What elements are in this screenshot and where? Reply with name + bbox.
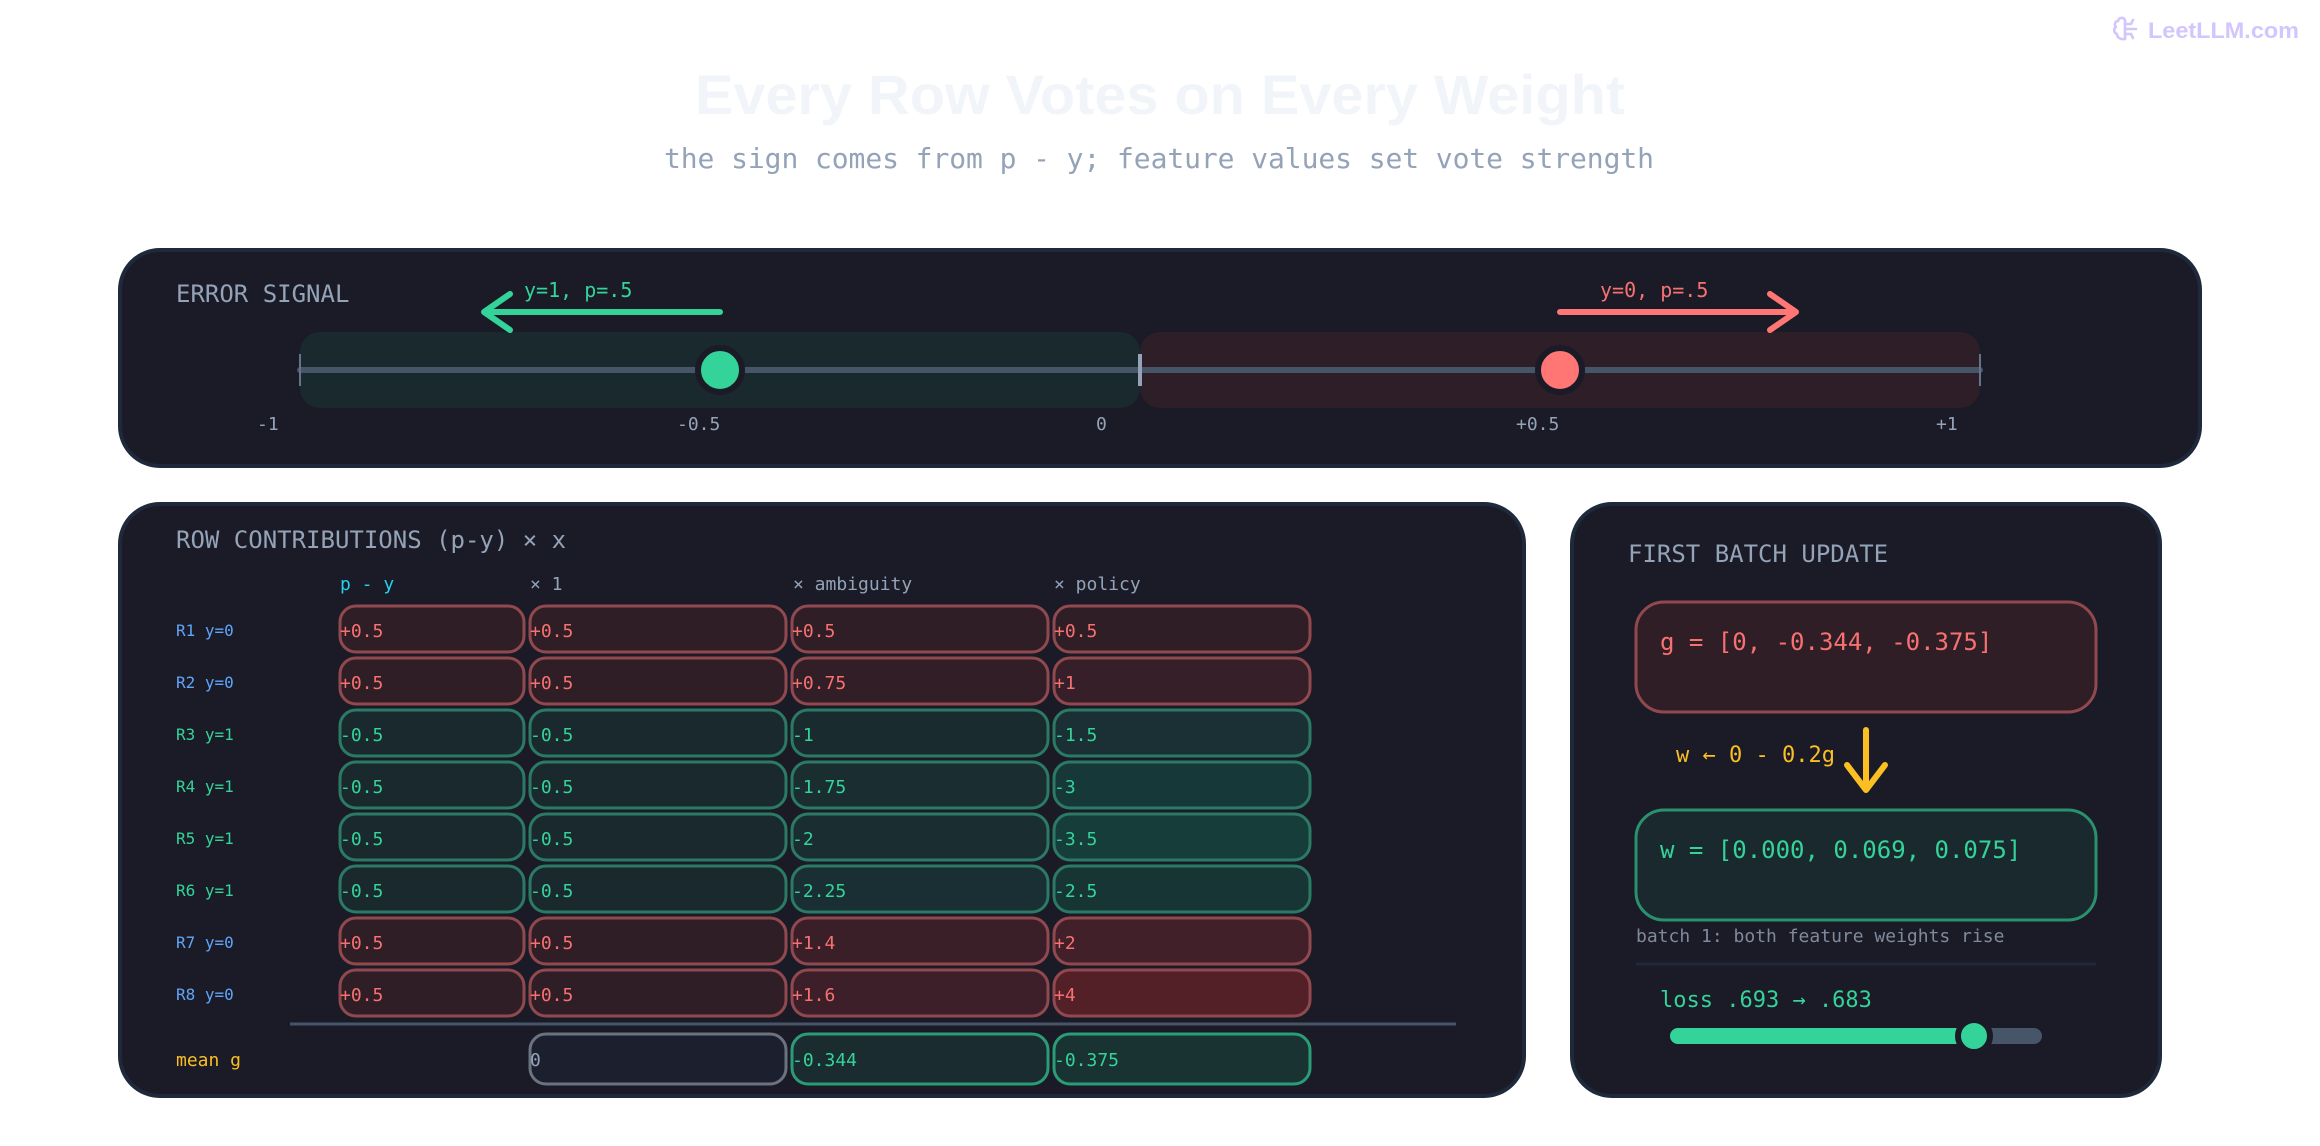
gradient box: g = [0, -0.344, -0.375] bbox=[1660, 628, 1992, 656]
icon: brain bbox=[2114, 18, 2136, 39]
row R3: -1.5 bbox=[1054, 725, 1097, 746]
row R1: +0.5 bbox=[530, 621, 573, 642]
column headers: × policy bbox=[1054, 574, 1141, 595]
axis labels: +1 bbox=[1936, 414, 1958, 435]
row: mean g: mean g bbox=[176, 1050, 241, 1071]
row R1 bbox=[176, 606, 1310, 652]
row R5: -0.5 bbox=[340, 829, 383, 850]
arrow: left, green bbox=[484, 294, 720, 330]
arrow: down bbox=[1847, 730, 1885, 790]
update rule: w ← 0 - 0.2g bbox=[1676, 743, 1835, 768]
row R3 bbox=[176, 710, 1310, 756]
row R1: R1 y=0 bbox=[176, 621, 234, 640]
number line bands bbox=[300, 332, 1980, 408]
row R8: R8 y=0 bbox=[176, 985, 234, 1004]
number line track and ticks bbox=[300, 354, 1980, 386]
loss label: loss .693 → .683 bbox=[1660, 988, 1872, 1013]
row R3: -0.5 bbox=[530, 725, 573, 746]
axis labels bbox=[257, 414, 1958, 435]
arrow: right, red bbox=[1560, 294, 1796, 330]
row R1: +0.5 bbox=[1054, 621, 1097, 642]
row R2: +1 bbox=[1054, 673, 1076, 694]
row R3: R3 y=1 bbox=[176, 725, 234, 744]
row R6: -0.5 bbox=[340, 881, 383, 902]
row: mean g: -0.375 bbox=[1054, 1050, 1119, 1071]
title: Every Row Votes on Every Weight bbox=[695, 63, 1625, 126]
row R4: -0.5 bbox=[340, 777, 383, 798]
row R6: -2.5 bbox=[1054, 881, 1097, 902]
row R8: +1.6 bbox=[792, 985, 835, 1006]
loss progress bar bbox=[1670, 1020, 2042, 1052]
row R2: +0.75 bbox=[792, 673, 846, 694]
row R8: +0.5 bbox=[530, 985, 573, 1006]
row R6: -0.5 bbox=[530, 881, 573, 902]
watermark: LeetLLM.com bbox=[2114, 18, 2299, 43]
row R8: +0.5 bbox=[340, 985, 383, 1006]
row R5 bbox=[176, 814, 1310, 860]
row R8 bbox=[176, 970, 1310, 1016]
weights box: w = [0.000, 0.069, 0.075] bbox=[1660, 836, 2021, 864]
row: mean g bbox=[176, 1034, 1310, 1084]
row R7: R7 y=0 bbox=[176, 933, 234, 952]
note: batch 1: both feature weights rise bbox=[1636, 926, 2004, 947]
label: y=1 p=.5: y=1, p=.5 bbox=[524, 278, 632, 302]
panel: first batch update bbox=[1572, 504, 2160, 1096]
marker: minus 0.5 bbox=[698, 348, 742, 392]
axis labels: -0.5 bbox=[677, 414, 720, 435]
row R3: -0.5 bbox=[340, 725, 383, 746]
row R6: -2.25 bbox=[792, 881, 846, 902]
row R5: R5 y=1 bbox=[176, 829, 234, 848]
row R4: R4 y=1 bbox=[176, 777, 234, 796]
row R4: -1.75 bbox=[792, 777, 846, 798]
heading: first batch update: FIRST BATCH UPDATE bbox=[1628, 540, 1888, 568]
row: mean g: 0 bbox=[530, 1050, 541, 1071]
row R2: +0.5 bbox=[530, 673, 573, 694]
panel: row contributions bbox=[120, 504, 1524, 1096]
row R5: -2 bbox=[792, 829, 814, 850]
heading: row contributions: ROW CONTRIBUTIONS (p-y) × x bbox=[176, 526, 566, 554]
row R2: +0.5 bbox=[340, 673, 383, 694]
gradient box bbox=[1636, 602, 2096, 712]
column headers: × ambiguity bbox=[793, 574, 912, 595]
subtitle: the sign comes from p - y; feature values set vote strength bbox=[664, 142, 1654, 175]
row R7: +2 bbox=[1054, 933, 1076, 954]
marker: plus 0.5 bbox=[1538, 348, 1582, 392]
label: y=0 p=.5: y=0, p=.5 bbox=[1600, 278, 1708, 302]
row R1: +0.5 bbox=[340, 621, 383, 642]
row R6: R6 y=1 bbox=[176, 881, 234, 900]
weights box bbox=[1636, 810, 2096, 920]
axis labels: -1 bbox=[257, 414, 279, 435]
row: mean g: -0.344 bbox=[792, 1050, 857, 1071]
row R2: R2 y=0 bbox=[176, 673, 234, 692]
row R6 bbox=[176, 866, 1310, 912]
row R4 bbox=[176, 762, 1310, 808]
row R5: -3.5 bbox=[1054, 829, 1097, 850]
row R7 bbox=[176, 918, 1310, 964]
row R7: +0.5 bbox=[340, 933, 383, 954]
axis labels: +0.5 bbox=[1516, 414, 1559, 435]
row R7: +1.4 bbox=[792, 933, 835, 954]
row R8: +4 bbox=[1054, 985, 1076, 1006]
panel: error signal bbox=[120, 250, 2200, 466]
heading: error signal: ERROR SIGNAL bbox=[176, 280, 349, 308]
row R3: -1 bbox=[792, 725, 814, 746]
row R1: +0.5 bbox=[792, 621, 835, 642]
row R7: +0.5 bbox=[530, 933, 573, 954]
row R5: -0.5 bbox=[530, 829, 573, 850]
row R2 bbox=[176, 658, 1310, 704]
column headers bbox=[340, 574, 1141, 595]
row R4: -3 bbox=[1054, 777, 1076, 798]
column headers: p - y bbox=[340, 574, 394, 595]
column headers: × 1 bbox=[530, 574, 563, 595]
row R4: -0.5 bbox=[530, 777, 573, 798]
axis labels: 0 bbox=[1096, 414, 1107, 435]
brand text: LeetLLM.com bbox=[2148, 18, 2299, 43]
